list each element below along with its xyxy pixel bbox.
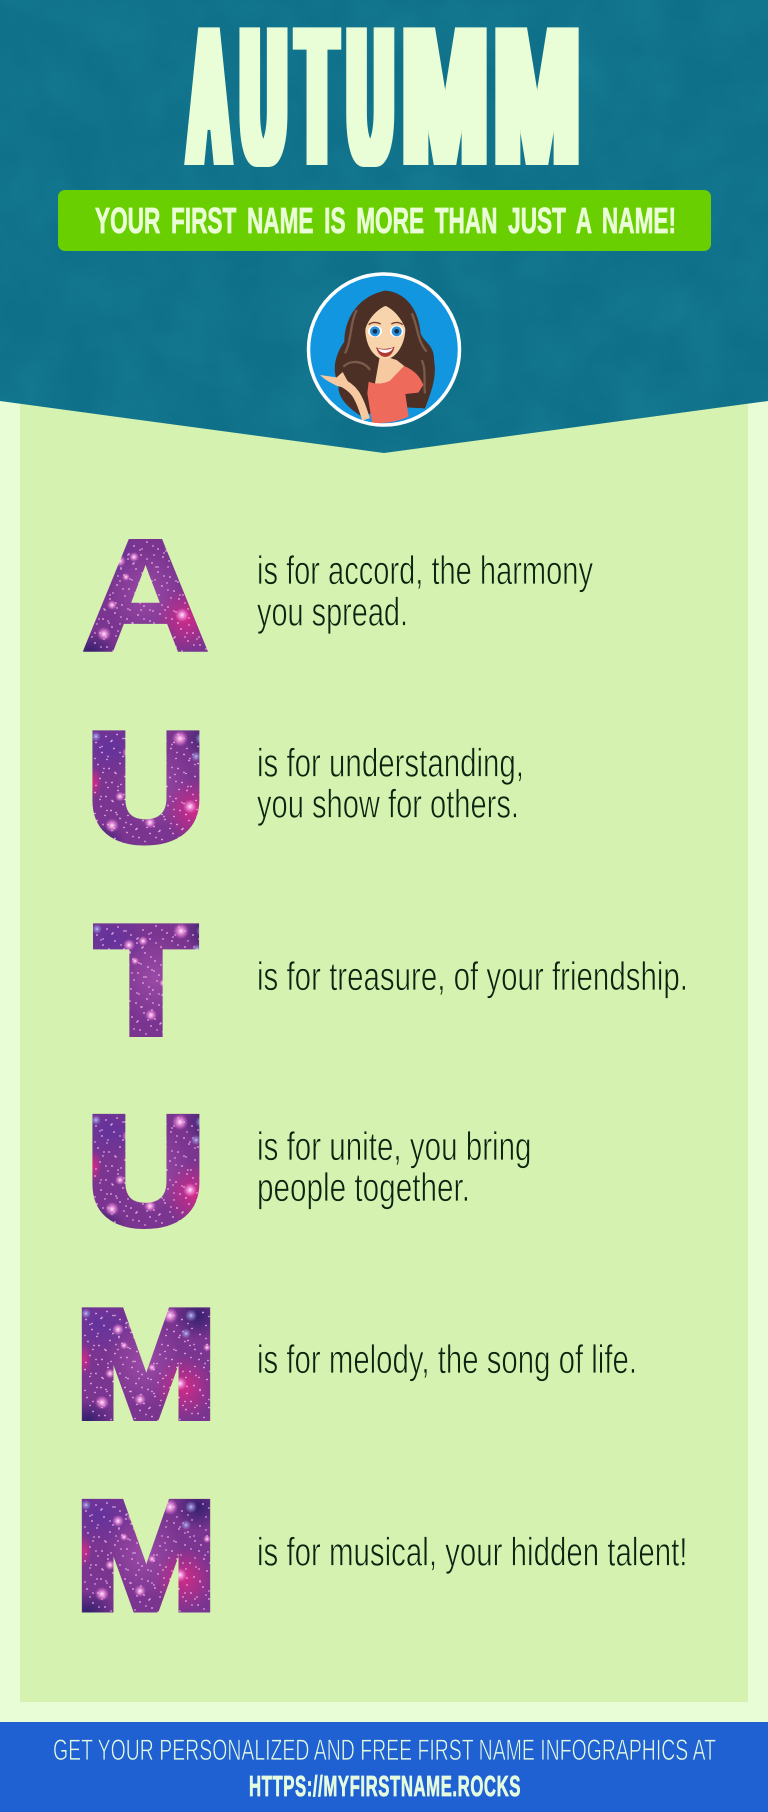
- text: line for U: you show for others.: [257, 782, 519, 826]
- letter M with galaxy fill: M: [76, 1280, 216, 1450]
- letter A with galaxy fill: A: [82, 508, 210, 684]
- text: line for U: people together.: [257, 1166, 470, 1210]
- text: line for A: is for accord, the harmony: [257, 549, 593, 593]
- text: line for U: is for unite, you bring: [257, 1125, 532, 1169]
- subtitle bar: [58, 190, 711, 251]
- text: line for U: [257, 742, 524, 826]
- icon: woman avatar in circle: [308, 274, 460, 425]
- letter T with galaxy fill: T: [96, 896, 196, 1066]
- text: line for A: you spread.: [257, 591, 408, 635]
- letter U with galaxy fill: U: [88, 702, 204, 872]
- text: line for M: is for melody, the song of life.: [257, 1338, 637, 1382]
- footer: [0, 1722, 768, 1812]
- letter U with galaxy fill: U: [88, 1086, 204, 1256]
- footer text: link: HTTPS://MYFIRSTNAME.ROCKS: [249, 1771, 521, 1803]
- panel: letters background: [20, 390, 748, 1702]
- text: line for A: [257, 549, 593, 635]
- title: [189, 0, 579, 209]
- letter M with galaxy fill: M: [76, 1471, 216, 1641]
- text: line for U: is for understanding,: [257, 742, 524, 786]
- text: line for U: [257, 1125, 532, 1210]
- header banner: [0, 0, 768, 460]
